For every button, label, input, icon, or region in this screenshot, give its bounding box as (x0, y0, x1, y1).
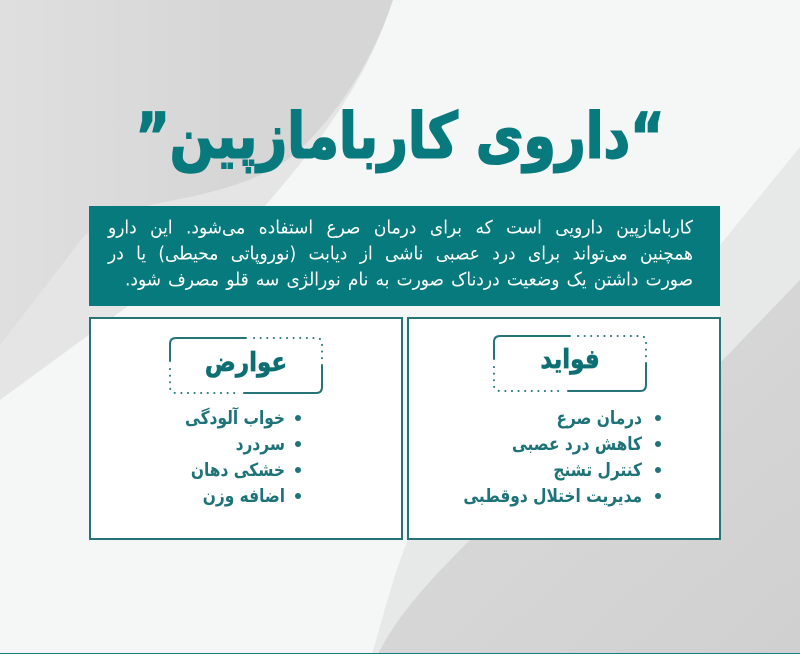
list: benefits: کاهش درد عصبی (512, 433, 642, 455)
list: side effects: خواب آلودگی (185, 407, 285, 429)
list: benefits: کنترل تشنج (553, 459, 642, 481)
heading badge: side effects (169, 337, 323, 394)
intro text panel: کاربامازپین دارویی است که برای درمان صرع استفاده می‌شود. این دارو (108, 217, 693, 239)
list: side effects (185, 407, 301, 507)
intro text panel: صورت داشتن یک وضعیت دردناک صورت به نام نورالژی سه قلو مصرف شود. (125, 269, 693, 291)
panel: side effects (89, 317, 403, 540)
list: side effects: اضافه وزن (203, 485, 285, 507)
list: side effects: سردرد (236, 433, 285, 455)
heading: benefits: فواید (540, 345, 600, 375)
heading badge: benefits (493, 335, 647, 392)
title: “داروی کاربامازپین” (136, 101, 664, 173)
list: benefits: درمان صرع (556, 407, 642, 429)
list: benefits: مدیریت اختلال دوقطبی (463, 485, 642, 507)
intro text panel: همچنین می‌تواند برای درد عصبی ناشی از دیابت (نوروپاتی محیطی) یا در (108, 243, 693, 265)
list: benefits (463, 407, 661, 507)
heading: side effects: عوارض (205, 348, 287, 378)
intro text panel (89, 206, 720, 306)
list: side effects: خشکی دهان (191, 459, 285, 481)
panel: benefits (407, 317, 721, 540)
